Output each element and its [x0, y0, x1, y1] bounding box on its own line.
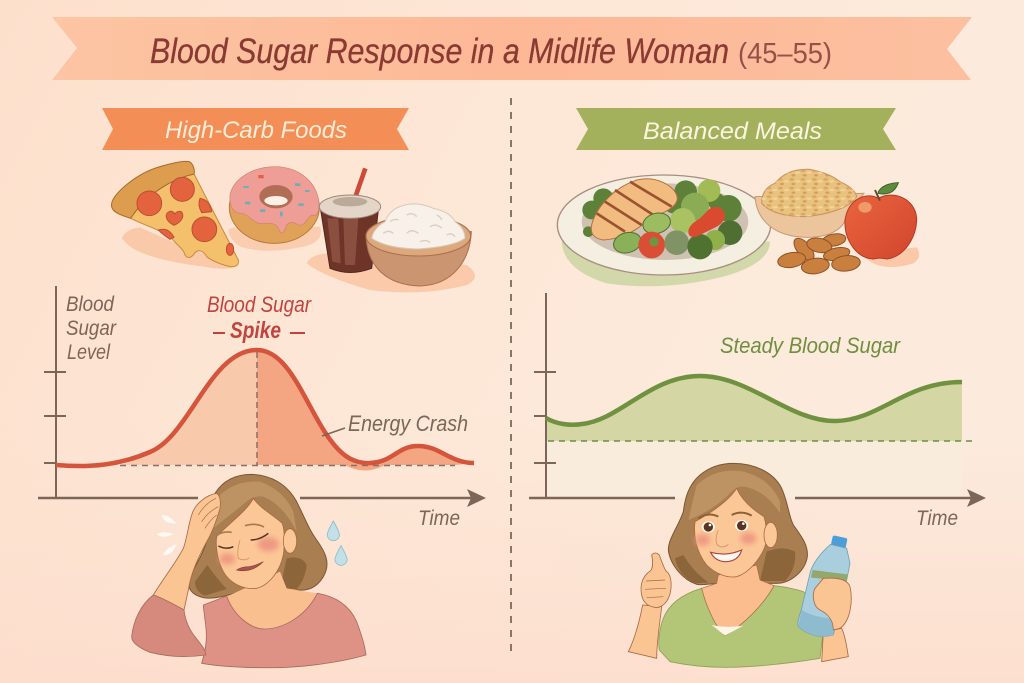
- hand holding bottle: [813, 578, 851, 630]
- illustration: happy woman: [628, 463, 851, 667]
- panel: balanced meals heading: [576, 108, 896, 150]
- label: energy crash: Energy Crash: [348, 411, 468, 436]
- panel: balanced meals heading: Balanced Meals: [643, 118, 822, 145]
- icon: high-carb foods group: [111, 161, 475, 292]
- panel: high-carb foods heading: [102, 108, 409, 150]
- icon: apple: [845, 183, 919, 267]
- face: [695, 488, 766, 577]
- label: time left: Time: [418, 507, 460, 530]
- icon: almonds: [777, 232, 861, 276]
- title banner: (45–55): [738, 38, 832, 70]
- icon: donut: [229, 167, 319, 243]
- shirt: [659, 586, 823, 667]
- label: blood sugar spike: Blood Sugar: [207, 292, 312, 317]
- face: [216, 498, 284, 589]
- panel: high-carb foods heading: High-Carb Foods: [165, 117, 347, 144]
- label: blood sugar level: Blood: [66, 293, 115, 316]
- title banner: Blood Sugar Response in a Midlife Woman: [150, 32, 729, 71]
- icon: soda cup: [319, 168, 381, 272]
- raised arm and hand: [153, 493, 220, 610]
- left arm with thumbs up: [628, 605, 662, 658]
- shirt: [202, 593, 366, 668]
- label: blood sugar level: Level: [67, 341, 111, 364]
- illustration: tired woman: [132, 474, 366, 668]
- icon: plate with chicken and vegetables: [557, 175, 771, 286]
- icon: stress marks: [157, 515, 177, 555]
- icon: grain bowl: [755, 169, 864, 237]
- neck and chest: [227, 572, 317, 628]
- label: time right: Time: [916, 507, 958, 530]
- label: blood sugar spike: [207, 292, 312, 343]
- chart: steady blood sugar: [529, 293, 986, 530]
- icon: sweat drops: [327, 521, 347, 565]
- icon: water bottle: [798, 535, 850, 636]
- icon: rice bowl: [366, 204, 471, 286]
- chart: blood sugar spike: [38, 286, 486, 530]
- icon: pizza slice: [111, 161, 238, 267]
- label: blood sugar level: Sugar: [66, 317, 117, 340]
- label: blood sugar level: [66, 293, 117, 364]
- arrow: time axis right: [967, 489, 986, 507]
- label: steady blood sugar: Steady Blood Sugar: [720, 333, 902, 358]
- right arm: [822, 628, 848, 662]
- neck and chest: [702, 565, 774, 636]
- label: blood sugar spike: Spike: [230, 317, 281, 343]
- arrow: time axis left: [467, 489, 486, 507]
- sleeve: [132, 595, 206, 656]
- title banner: [52, 17, 972, 80]
- icon: balanced meal group: [557, 169, 919, 286]
